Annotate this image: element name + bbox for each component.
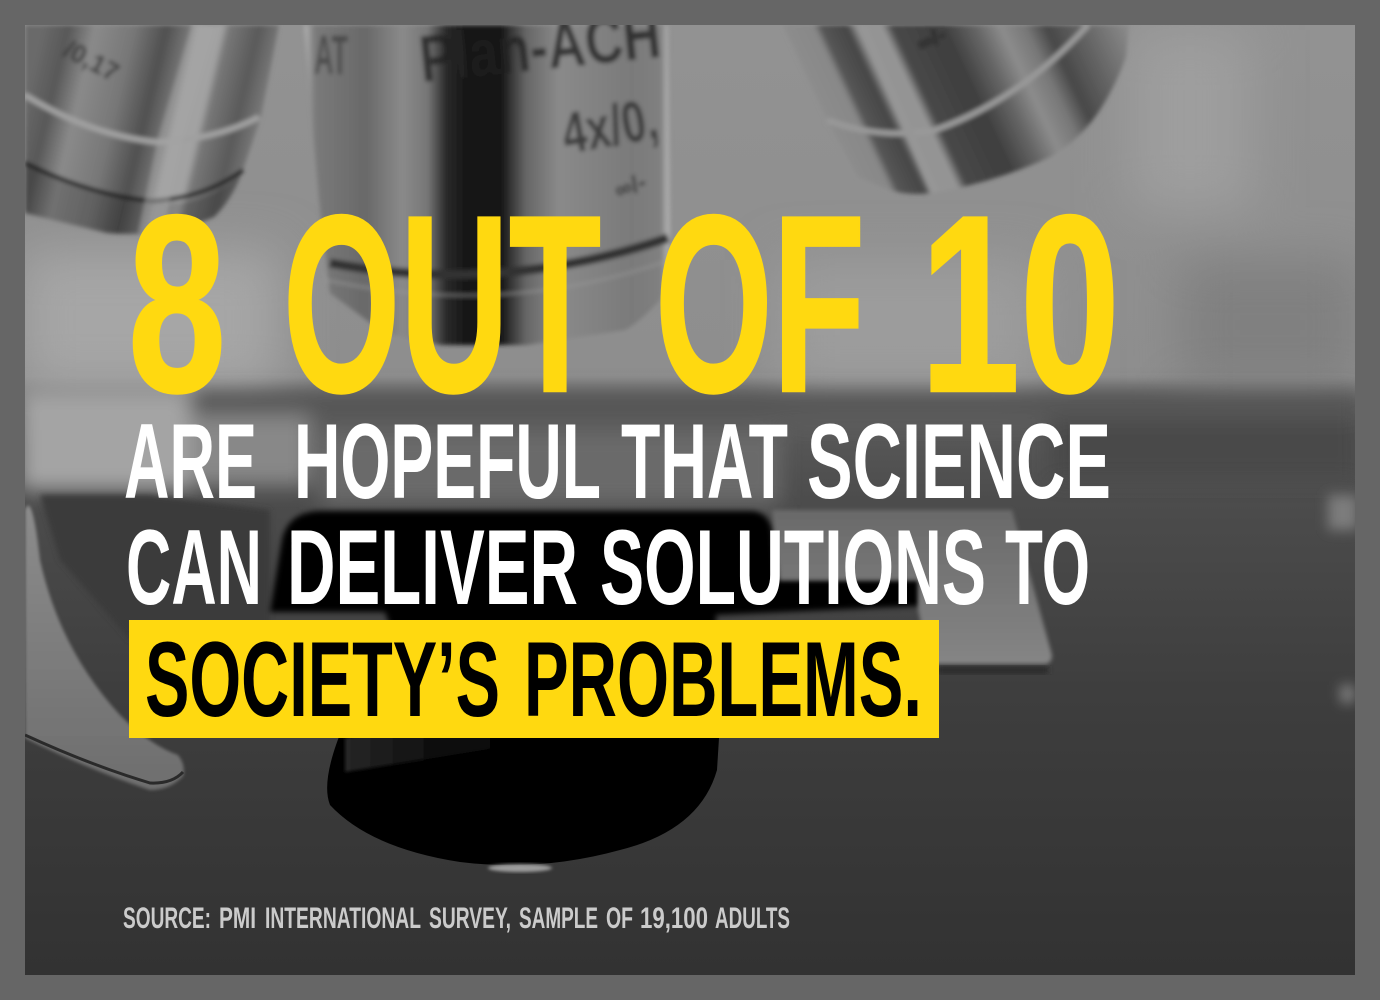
center objective lens xyxy=(304,0,670,345)
right objective lens: ∞/- xyxy=(913,22,950,57)
statement line 1: HOPEFUL xyxy=(294,401,601,521)
source note: ADULTS xyxy=(715,902,790,935)
center objective lens: 4x/0, xyxy=(557,86,663,167)
right objective lens xyxy=(783,22,1129,194)
statement line 1: ARE xyxy=(124,401,257,521)
source note: 19,100 xyxy=(640,902,708,935)
left objective lens: /0,17 xyxy=(59,34,124,87)
source note: PMI xyxy=(219,902,256,935)
statement line 2: SOLUTIONS xyxy=(600,507,986,627)
statement line 2: DELIVER xyxy=(287,507,578,627)
left dark recess xyxy=(40,495,270,640)
statement line 2: TO xyxy=(1005,507,1090,627)
stage specks xyxy=(1328,495,1358,703)
slide shadow xyxy=(938,666,1048,674)
source note: INTERNATIONAL xyxy=(265,902,421,935)
statement line 1: SCIENCE xyxy=(807,401,1111,521)
statement line 2: CAN xyxy=(126,507,262,627)
headline: 8 out of 10: 8 xyxy=(128,164,226,445)
source note: SAMPLE xyxy=(519,902,598,935)
headline: 8 out of 10: 10 xyxy=(920,164,1120,445)
headline: 8 out of 10: OUT xyxy=(283,164,601,445)
highlighted statement xyxy=(129,619,939,739)
center objective lens: AT xyxy=(314,23,348,86)
headline: 8 out of 10: OF xyxy=(655,164,865,445)
source note: OF xyxy=(606,902,633,935)
headline: 8 out of 10 xyxy=(128,164,1120,445)
source note: SURVEY, xyxy=(429,902,511,935)
black stage opening xyxy=(268,508,920,620)
statement line 2 xyxy=(126,507,1090,627)
stage band xyxy=(20,390,1360,505)
light backdrop glow xyxy=(20,30,1360,390)
highlight box xyxy=(129,620,939,738)
source note: SOURCE: xyxy=(123,902,211,935)
highlight text: SOCIETY’S xyxy=(145,619,500,739)
statement line 1: THAT xyxy=(621,401,788,521)
left objective lens xyxy=(25,25,279,235)
center objective lens: ∞/- xyxy=(611,168,650,205)
statement line 1 xyxy=(124,401,1111,521)
condenser hole xyxy=(327,722,720,872)
source note xyxy=(123,902,790,935)
highlight text: PROBLEMS. xyxy=(524,619,922,739)
specimen clip xyxy=(25,506,184,790)
glass slide xyxy=(772,510,1052,664)
